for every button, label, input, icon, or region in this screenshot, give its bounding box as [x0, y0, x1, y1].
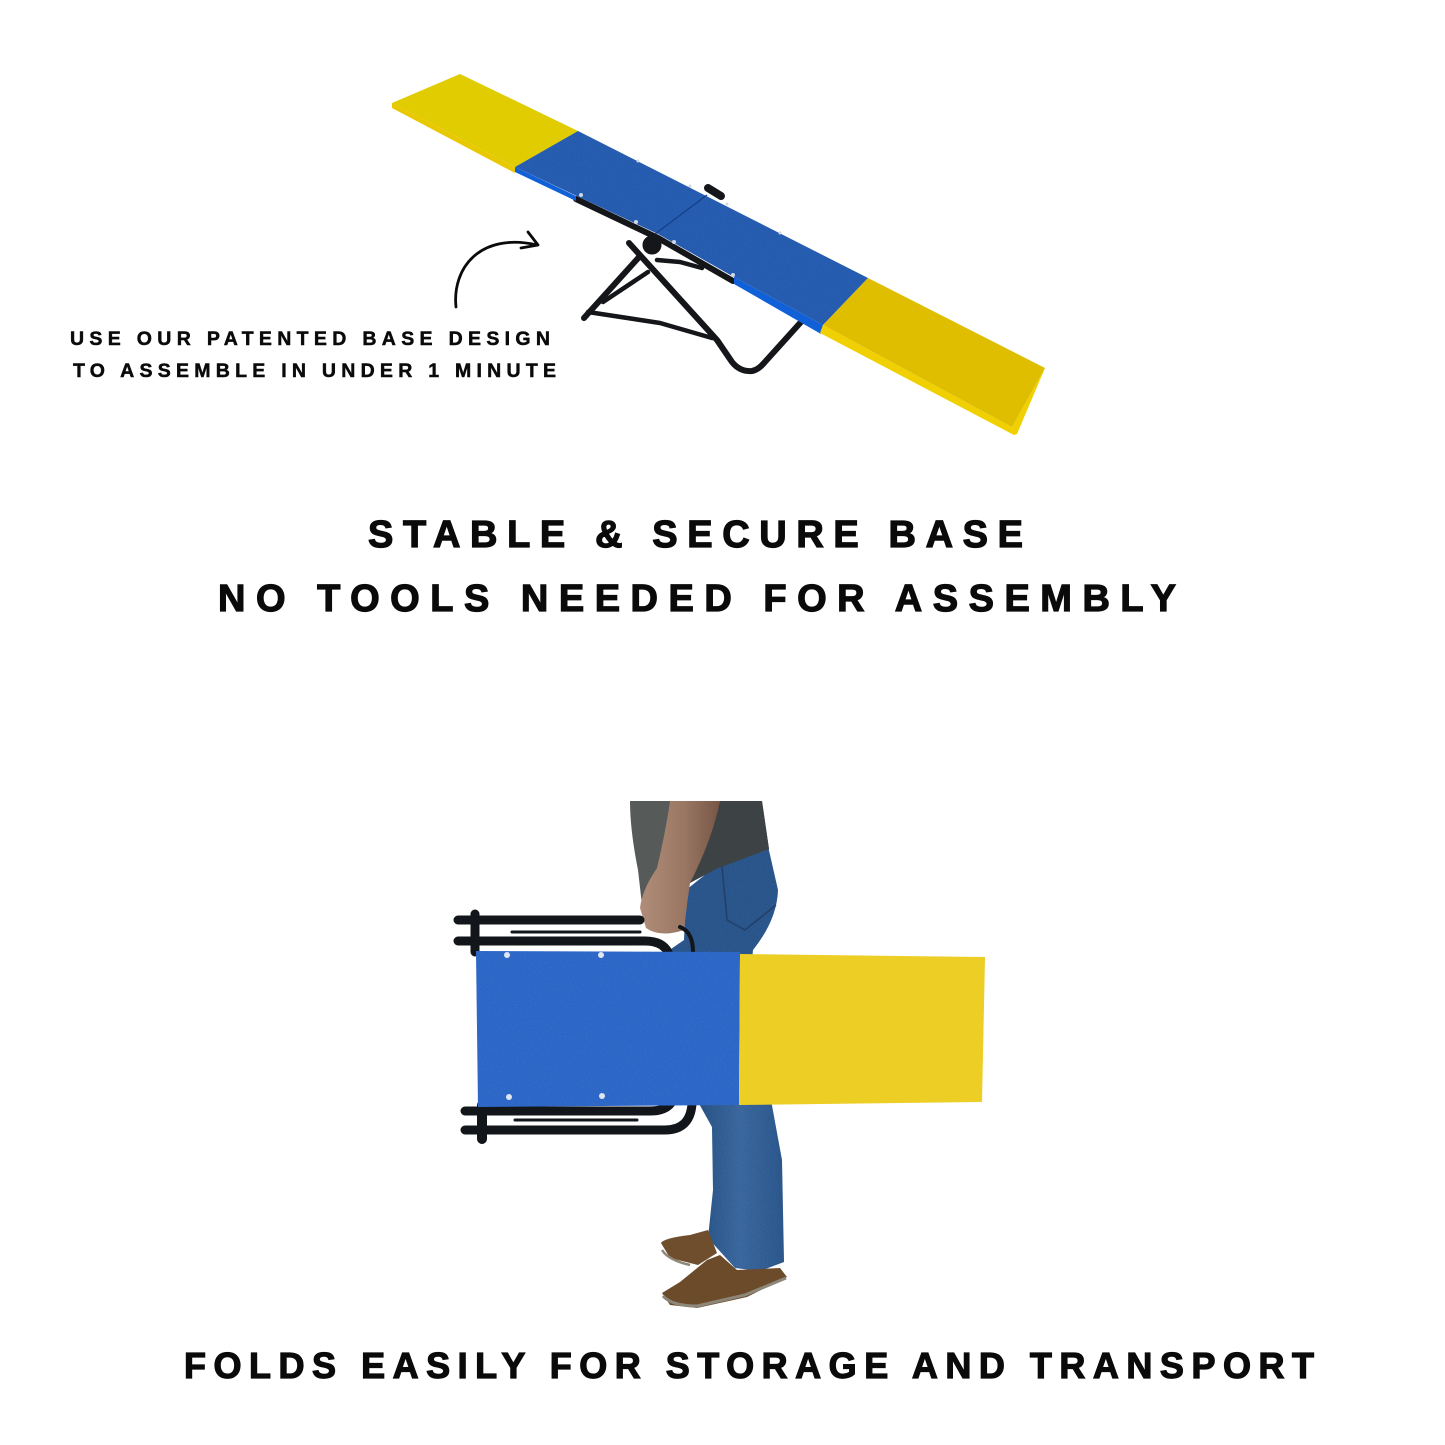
main heading: [218, 514, 1176, 620]
jeans pocket: [722, 866, 776, 930]
arrow to base: [456, 232, 538, 307]
jeans lower: [697, 1100, 784, 1271]
person carrying folded teeter: [630, 801, 787, 1308]
folding base frame: [576, 188, 801, 371]
blue centre section: [515, 131, 868, 334]
shoes: [661, 1230, 787, 1308]
folded yellow panel: [739, 954, 985, 1105]
main heading: NO TOOLS NEEDED FOR ASSEMBLY: [218, 578, 1176, 620]
base design caption: TO ASSEMBLE IN UNDER 1 MINUTE: [73, 360, 556, 382]
base design caption: USE OUR PATENTED BASE DESIGN: [70, 328, 550, 350]
main heading: STABLE & SECURE BASE: [368, 514, 1023, 556]
folded frame tubes: [458, 914, 693, 1139]
panel bolts: [504, 952, 605, 1100]
jeans upper: [655, 846, 778, 960]
right yellow section: [820, 278, 1045, 435]
base design caption: [70, 328, 556, 382]
shirt: [630, 801, 769, 905]
folds caption: FOLDS EASILY FOR STORAGE AND TRANSPORT: [184, 1345, 1314, 1386]
folded blue panel: [476, 951, 740, 1107]
arm and hand: [640, 801, 720, 934]
left yellow section: [392, 74, 578, 173]
teeter product photo: [392, 74, 1045, 435]
folded teeter: [458, 914, 985, 1139]
